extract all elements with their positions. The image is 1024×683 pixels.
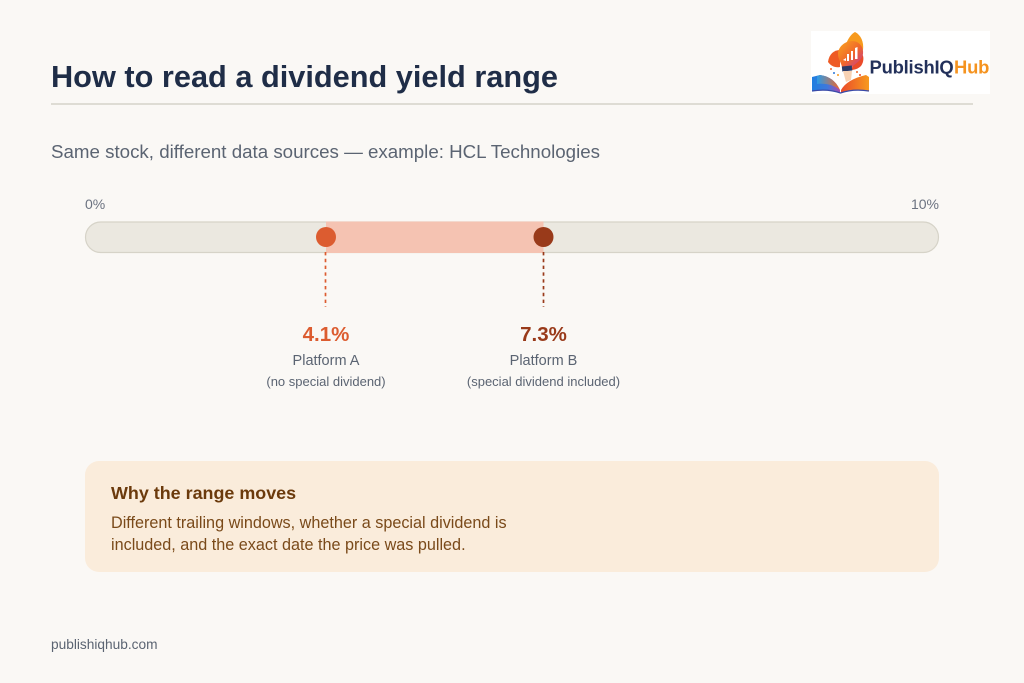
- callout: why the range moves: included, and the exact date the price was pulled.: [111, 536, 466, 554]
- marker: Platform B: [534, 227, 554, 307]
- marker: Platform A: [316, 227, 336, 307]
- label: Platform A: (no special dividend): [266, 374, 386, 389]
- scale label: 0%: 0%: [85, 196, 105, 212]
- subtitle: Same stock, different data sources — example: HCL Technologies: [51, 141, 600, 162]
- label: Platform B: (special dividend included): [467, 374, 620, 389]
- label: Platform A: Platform A: [293, 353, 360, 369]
- logo wordmark: PublishIQHub: [870, 56, 989, 78]
- title: How to read a dividend yield range: [51, 59, 558, 94]
- callout: why the range moves: Different trailing windows, whether a special dividend is: [111, 514, 507, 532]
- highlighted range: [326, 222, 544, 253]
- label: Platform B: [467, 323, 620, 389]
- label: Platform A: 4.1%: [303, 323, 349, 346]
- callout: why the range moves: [85, 461, 939, 572]
- callout: why the range moves: Why the range moves: [111, 483, 296, 503]
- label: Platform B: Platform B: [510, 353, 577, 369]
- icon: open book: [812, 75, 869, 93]
- icon: rocket bulb: [828, 32, 863, 82]
- label: Platform B: 7.3%: [520, 323, 567, 346]
- scale label: 10%: 10%: [911, 196, 939, 212]
- footer: publishiqhub.com: [51, 637, 158, 652]
- range track: [86, 222, 938, 253]
- label: Platform A: [266, 323, 386, 389]
- logo: [811, 31, 990, 94]
